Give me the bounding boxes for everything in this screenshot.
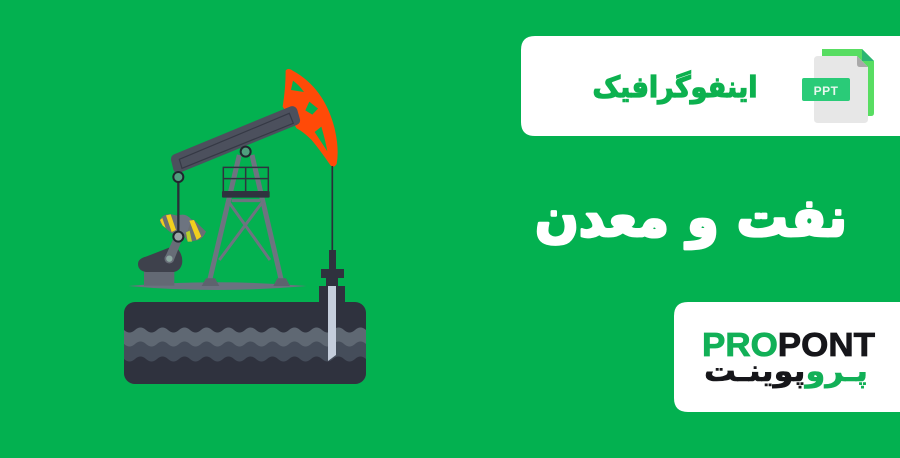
crank joint lower bbox=[165, 255, 173, 263]
wellhead bbox=[319, 250, 345, 302]
derrick feet bbox=[202, 278, 290, 286]
derrick tower bbox=[209, 155, 282, 282]
rock layer bottom bbox=[113, 356, 377, 384]
horse head bbox=[283, 69, 338, 167]
logo: Persian wordmark: پـروپوینـت bbox=[704, 354, 868, 389]
pump jack above ground bbox=[128, 69, 338, 290]
rock layer light bbox=[113, 328, 377, 384]
platform railing bbox=[223, 167, 269, 192]
logo card background bbox=[674, 302, 900, 412]
walking beam bbox=[171, 106, 300, 173]
crank joint upper bbox=[173, 232, 183, 242]
rock layer mid bbox=[113, 342, 377, 384]
pitman rod bbox=[175, 177, 182, 237]
drill pipe bbox=[328, 286, 336, 361]
pivot bearing bbox=[241, 147, 251, 157]
platform bbox=[222, 191, 270, 198]
logo: PROPONT latin: PROPONT bbox=[702, 326, 875, 363]
beam joint bbox=[173, 172, 183, 182]
heading: infographic: اینفوگرافیک bbox=[592, 70, 758, 104]
crank arm bbox=[165, 235, 183, 262]
icon: PPT file bbox=[802, 49, 874, 123]
panel: infographic label bbox=[521, 36, 900, 136]
rock body bbox=[124, 302, 366, 384]
polished rod cable bbox=[330, 166, 335, 252]
panel: logo card bbox=[674, 302, 900, 412]
illustration: oil pump jack bbox=[113, 69, 377, 384]
gearbox bbox=[138, 246, 182, 272]
title: oil and mining: نفت و معدن bbox=[535, 188, 847, 249]
counterweight bbox=[160, 214, 206, 242]
gearbox base bbox=[144, 268, 174, 286]
underground reservoir bbox=[113, 286, 377, 384]
beam inset bbox=[179, 113, 293, 168]
icon: PPT file: PPT bbox=[814, 84, 839, 98]
label card bbox=[521, 36, 900, 136]
rock layers bbox=[113, 328, 377, 384]
ground line bbox=[128, 282, 307, 290]
